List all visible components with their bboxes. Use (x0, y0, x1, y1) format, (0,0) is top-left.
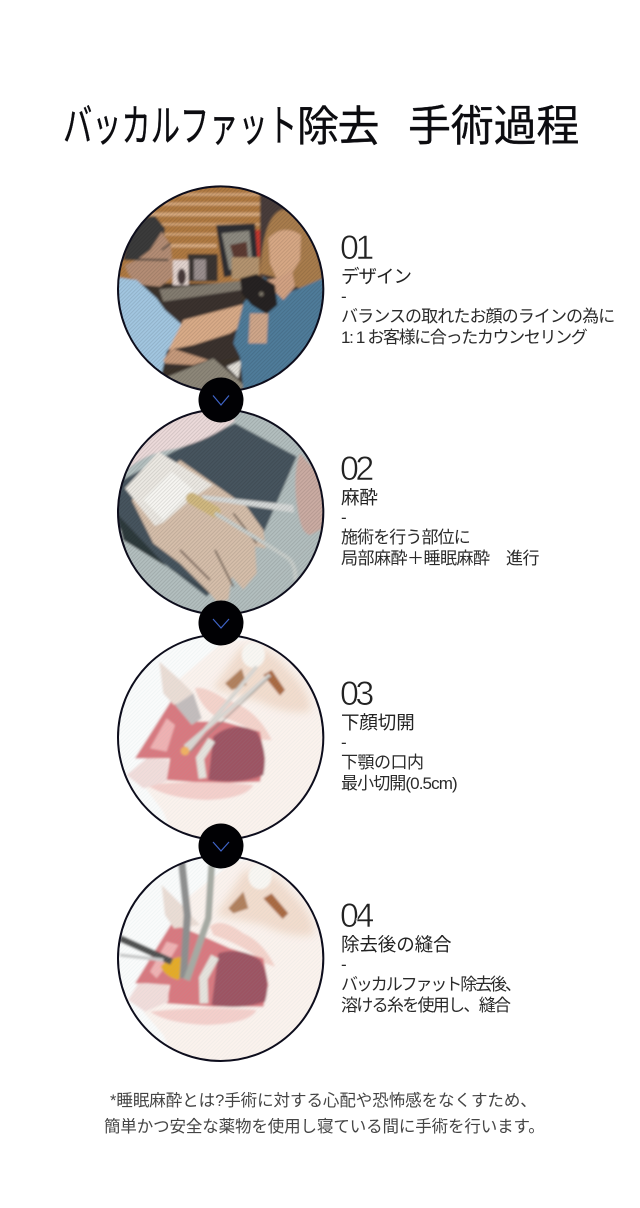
footnote: *睡眠麻酔とは?手術に対する心配や恐怖感をなくすため、 (110, 1092, 537, 1110)
mirror (240, 274, 277, 314)
step 04 text: バッカルファット除去後、 (341, 975, 520, 994)
step 01 text: - (341, 287, 346, 306)
step 04 text: 溶ける糸を使用し、縫合 (341, 996, 509, 1015)
face skin (147, 640, 322, 837)
other hand (295, 454, 322, 535)
step 01 text: デザイン (341, 266, 411, 287)
chevron badge 2 (198, 600, 244, 646)
step 02 text (340, 450, 539, 568)
teeth (200, 740, 212, 778)
mouth cavity (208, 727, 265, 782)
step 03 text: 03 (340, 675, 371, 713)
step 04 text: - (341, 955, 346, 974)
retractor top (162, 885, 200, 928)
step 04 text: 04 (340, 897, 371, 935)
step 03 text (340, 675, 457, 793)
man (123, 216, 165, 260)
upper lip (210, 923, 275, 967)
step 03 text: 下顎の口内 (341, 753, 424, 772)
forceps top (182, 862, 187, 978)
upper lip (195, 688, 272, 740)
step 02 text: - (341, 508, 346, 527)
retractor bottom (128, 983, 168, 1012)
chevron badge 3 (198, 824, 244, 868)
fat (161, 957, 185, 980)
step 02 text: 施術を行う部位に (341, 528, 470, 547)
face skin (146, 860, 322, 1060)
mouth cavity (212, 951, 267, 1007)
sleeve (128, 412, 236, 470)
step 02 text: 02 (340, 450, 371, 488)
step 01 text: 1: 1 お客様に合ったカウンセリング (341, 328, 586, 347)
retractor top (159, 662, 193, 705)
step 01 text: 01 (340, 229, 371, 267)
armrest (117, 423, 297, 597)
title (63, 102, 579, 151)
footnote: 簡単かつ安全な薬物を使用し寝ている間に手術を行います。 (104, 1118, 545, 1136)
illustration 3: incision (113, 632, 333, 845)
teeth (203, 957, 215, 1003)
step 04 text (340, 897, 520, 1015)
counter (167, 357, 244, 389)
step 03 text: 下顔切開 (341, 712, 415, 733)
step 03 text: - (341, 733, 346, 752)
photo 1: consultation (113, 183, 330, 397)
retractor bottom (127, 758, 168, 788)
step 04 text: 除去後の縫合 (341, 934, 451, 955)
step 02 text: 局部麻酔＋睡眠麻酔 進行 (341, 549, 539, 568)
syringe (202, 495, 294, 513)
hand (132, 460, 266, 602)
step 03 text: 最小切開(0.5cm) (341, 774, 457, 793)
footnote (104, 1092, 545, 1136)
mucosa (135, 923, 268, 1007)
title: 除去 (297, 103, 378, 150)
title: 手術過程 (408, 103, 579, 151)
step 01 text (340, 229, 614, 347)
photo 2: anesthesia hand (113, 407, 330, 620)
tape (125, 452, 213, 526)
title: バッカルファット (63, 102, 297, 151)
lower lip (150, 1008, 257, 1025)
lower lip (147, 782, 253, 800)
mucosa (135, 700, 265, 783)
forceps (185, 667, 270, 750)
chevron badge 1 (198, 378, 244, 422)
step 01 text: バランスの取れたお顔のラインの為に (341, 307, 614, 326)
woman (260, 209, 323, 288)
illustration 4: suture (113, 852, 333, 1065)
step 02 text: 麻酔 (341, 487, 378, 508)
forceps left (120, 938, 172, 962)
